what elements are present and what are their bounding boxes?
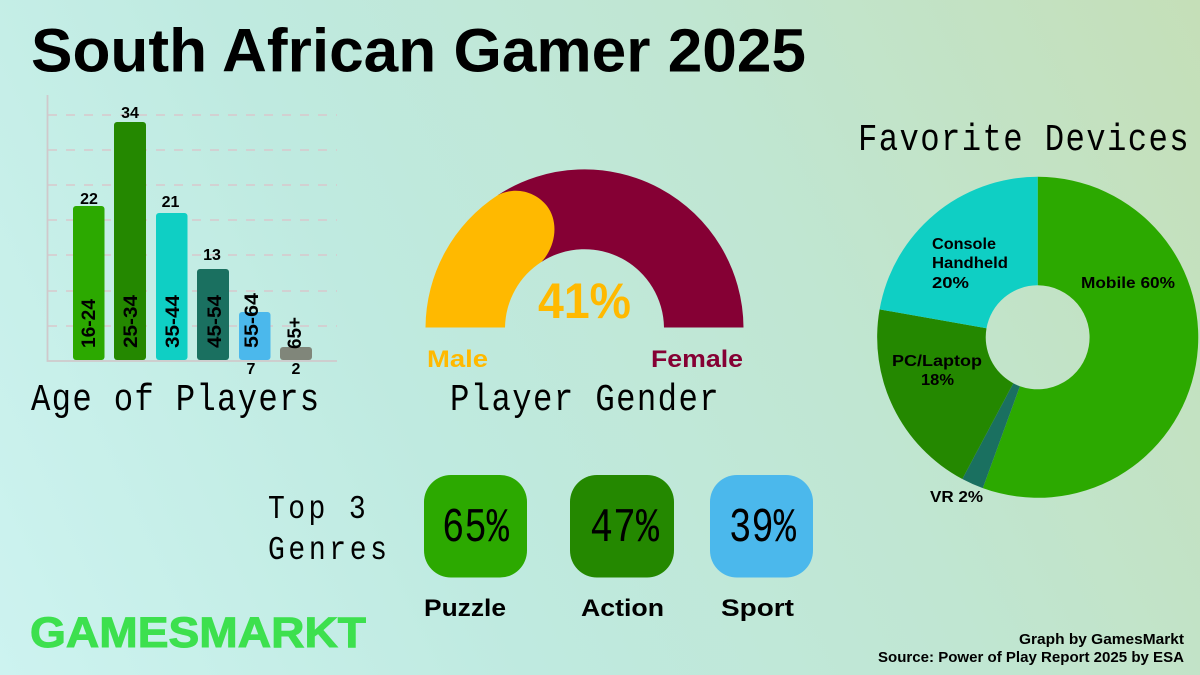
age group labels: 16-24 — [79, 299, 100, 348]
bar values — [80, 105, 301, 378]
age group labels: 45-54 — [205, 295, 226, 348]
chart heading: age of players: Age of Players — [31, 379, 319, 422]
bar values: 34 — [121, 105, 139, 122]
genres heading: Genres — [268, 533, 387, 570]
genre card: sport: Sport — [721, 595, 794, 622]
age group labels — [79, 293, 306, 349]
chart heading: favorite devices: Favorite Devices — [858, 119, 1189, 162]
genre card: sport — [710, 475, 813, 622]
legend: male: Male — [427, 346, 488, 373]
genre card: puzzle: Puzzle — [424, 595, 506, 622]
donut labels: PC/Laptop — [892, 353, 982, 370]
chart heading: player gender: Player Gender — [450, 379, 719, 422]
title: South African Gamer 2025 — [31, 16, 806, 84]
bar chart — [73, 122, 312, 360]
age group labels: 65+ — [285, 317, 306, 349]
donut labels — [892, 236, 1175, 506]
legend: female: Female — [651, 346, 743, 373]
source credits: Graph by GamesMarkt — [1019, 632, 1184, 648]
age group labels: 35-44 — [163, 295, 184, 348]
source credits — [878, 632, 1185, 666]
genre card: sport: 39% — [729, 502, 796, 556]
bar values: 2 — [292, 361, 301, 378]
genre card: puzzle — [424, 475, 527, 622]
gauge: female segment — [498, 169, 744, 328]
gauge: male segment — [426, 191, 554, 328]
panel: favorite devices — [858, 119, 1198, 506]
logo: gamesmarkt: GAMESMARKT — [30, 609, 366, 657]
genres heading — [268, 492, 387, 570]
age group labels: 25-34 — [121, 295, 142, 348]
genre card: action: Action — [581, 595, 664, 622]
panel: top 3 genres — [268, 475, 813, 622]
panel: player gender — [426, 169, 744, 422]
donut labels: Console — [932, 236, 996, 253]
source credits: Source: Power of Play Report 2025 by ESA — [878, 650, 1185, 666]
gauge value: 41% — [538, 273, 631, 329]
bar values: 7 — [247, 361, 256, 378]
genres heading: Top 3 — [268, 492, 366, 529]
age group labels: 55-64 — [242, 293, 263, 348]
donut labels: Mobile 60% — [1081, 275, 1175, 292]
donut labels: VR 2% — [930, 489, 983, 506]
bar values: 22 — [80, 191, 98, 208]
donut labels: 20% — [932, 275, 969, 292]
donut chart — [877, 177, 1198, 498]
donut labels: Handheld — [932, 255, 1008, 272]
donut labels: 18% — [921, 372, 954, 389]
genre card: puzzle: 65% — [442, 502, 509, 556]
bar values: 21 — [162, 194, 180, 211]
panel: age of players — [31, 95, 337, 422]
genre card: action — [570, 475, 674, 622]
bar values: 13 — [203, 247, 221, 264]
genre card: action: 47% — [590, 502, 659, 556]
